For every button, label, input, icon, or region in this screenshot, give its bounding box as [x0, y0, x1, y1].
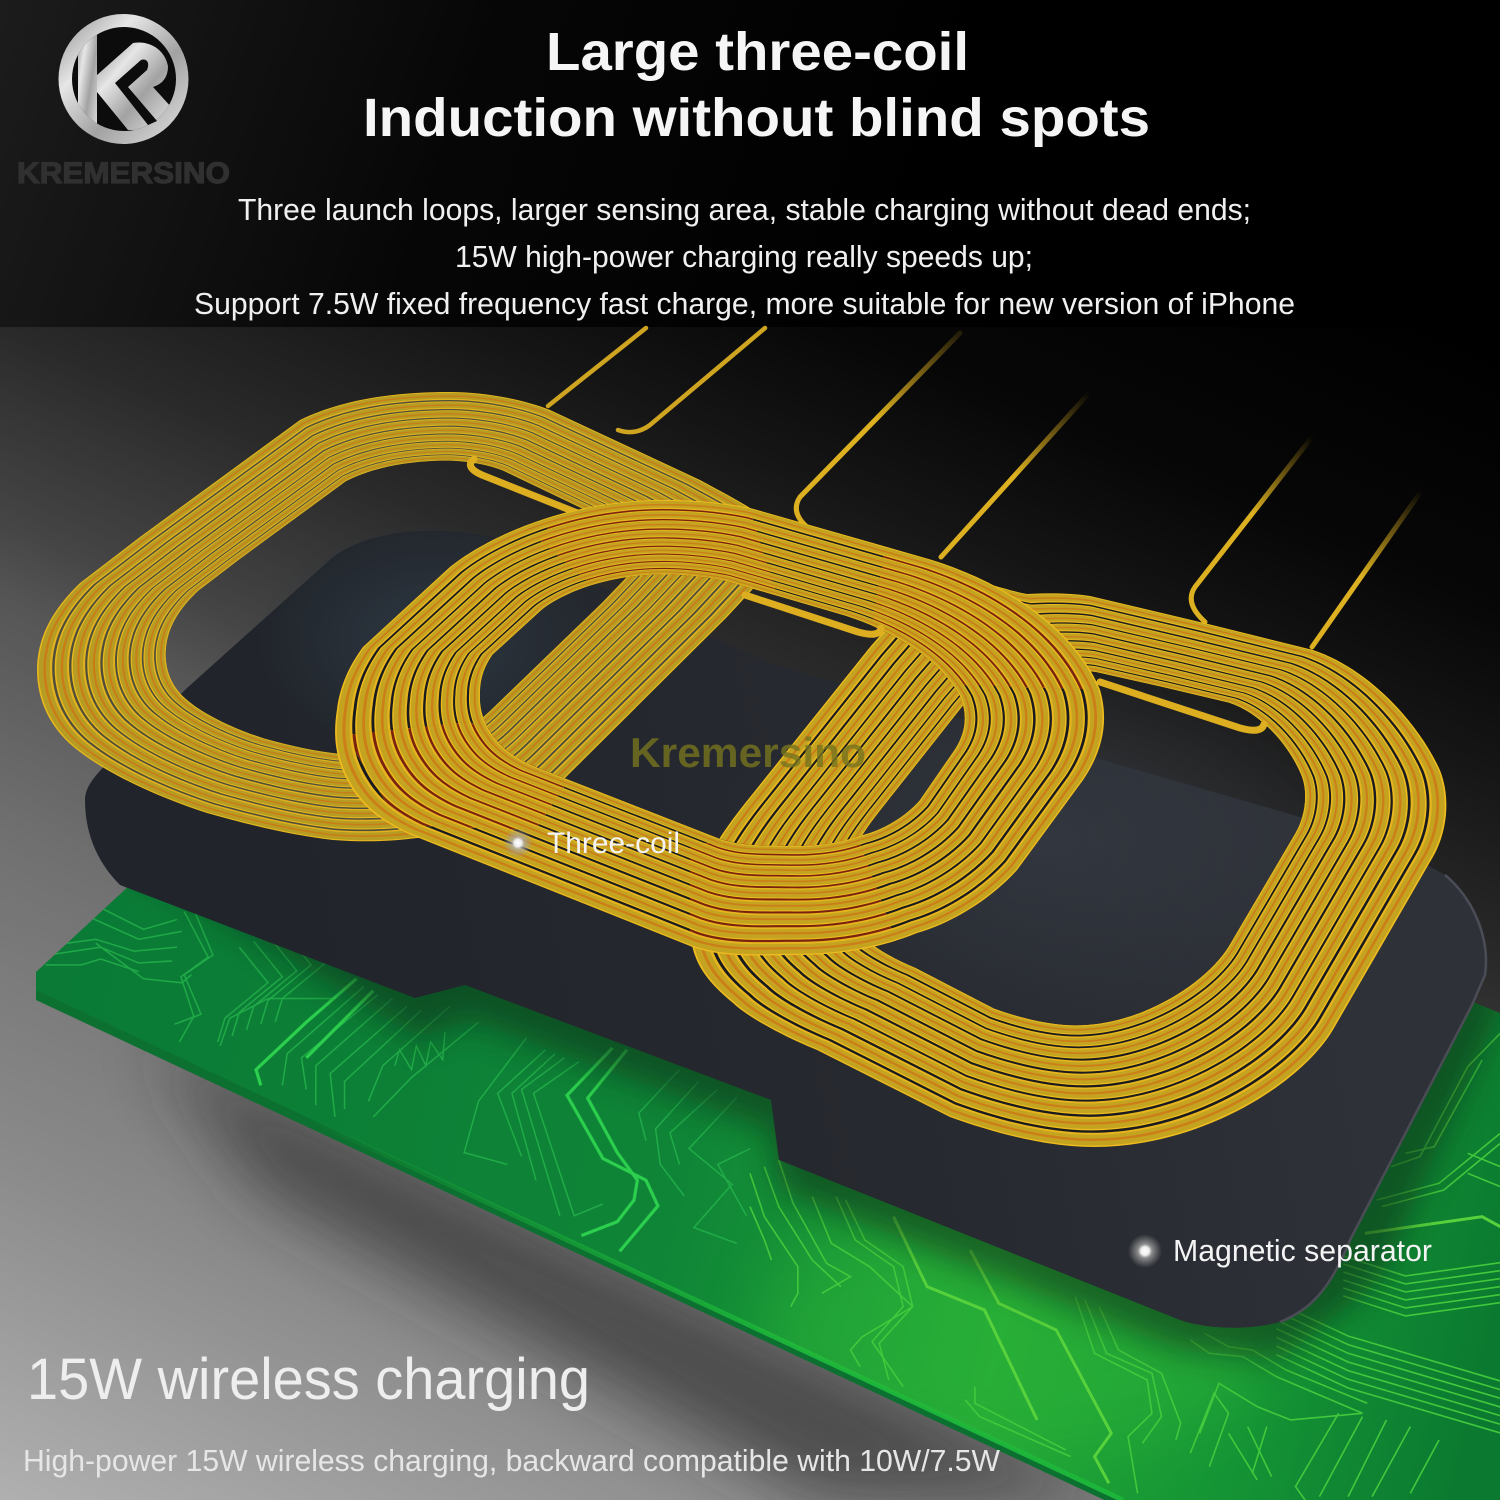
lead pair: left coil: [548, 328, 765, 432]
callout dot: [503, 828, 533, 858]
heading: 15W wireless charging: 15W wireless charging: [27, 1347, 590, 1412]
separator body: [85, 531, 1486, 1328]
left coil: [37, 392, 753, 842]
description line 3: Support 7.5W fixed frequency fast charge, more suitable for new version of iPhone: [194, 286, 1295, 321]
bright glow on board: [768, 1237, 1254, 1438]
middle coil: [335, 500, 1104, 956]
separator soft highlight: [720, 650, 1380, 1030]
lead pair: middle coil: [796, 333, 1090, 557]
logo K and R letterform: [78, 34, 169, 130]
middle coil overlap tint: [345, 500, 1100, 956]
callout: three-coil: [503, 827, 680, 860]
circuit traces left half: [45, 904, 1500, 1500]
logo inner disc: [72, 27, 176, 131]
board surface: [36, 884, 1500, 1500]
callout dot: [1128, 1234, 1162, 1268]
top header band: [0, 0, 1500, 327]
callout label: Magnetic separator: [1173, 1233, 1432, 1268]
circuit traces right half: [750, 1033, 1500, 1500]
background: lower gradient panel: [0, 327, 1500, 1500]
right coil: [692, 586, 1446, 1147]
coil lead wires: [548, 328, 1422, 647]
magnetic separator panel: [85, 520, 1486, 1328]
right coil end strand: [1100, 682, 1264, 730]
logo dark slot: [115, 60, 157, 125]
logo mark: [58, 14, 188, 144]
middle coil end strand: [745, 595, 881, 634]
separator right edge highlight: [1280, 875, 1486, 1322]
watermark: Kremersino: [630, 729, 866, 776]
callout label: Three-coil: [547, 827, 680, 860]
callout: magnetic separator: [1128, 1233, 1432, 1268]
description line 1: Three launch loops, larger sensing area, stable charging without dead ends;: [238, 192, 1251, 227]
circuit board: [36, 888, 1500, 1500]
logo ring: [58, 14, 188, 144]
title line 1: Large three-coil: [546, 22, 969, 82]
lead pair: right coil: [1191, 437, 1422, 647]
bright board edge: [300, 1115, 1123, 1500]
title line 2: Induction without blind spots: [363, 88, 1150, 148]
separator shadow on board: [184, 910, 1500, 1378]
shadow below circuit board: [150, 1040, 1120, 1500]
board thickness edge: [36, 975, 1140, 1500]
brand name under logo: KREMERSINO: [17, 157, 230, 190]
subheading: compatibility: High-power 15W wireless charging, backward compatible with 10W/7.5W: [23, 1443, 1001, 1478]
separator upper navy tint: [260, 520, 600, 760]
description line 2: 15W high-power charging really speeds up;: [455, 239, 1033, 274]
left coil end strand: [470, 459, 600, 522]
